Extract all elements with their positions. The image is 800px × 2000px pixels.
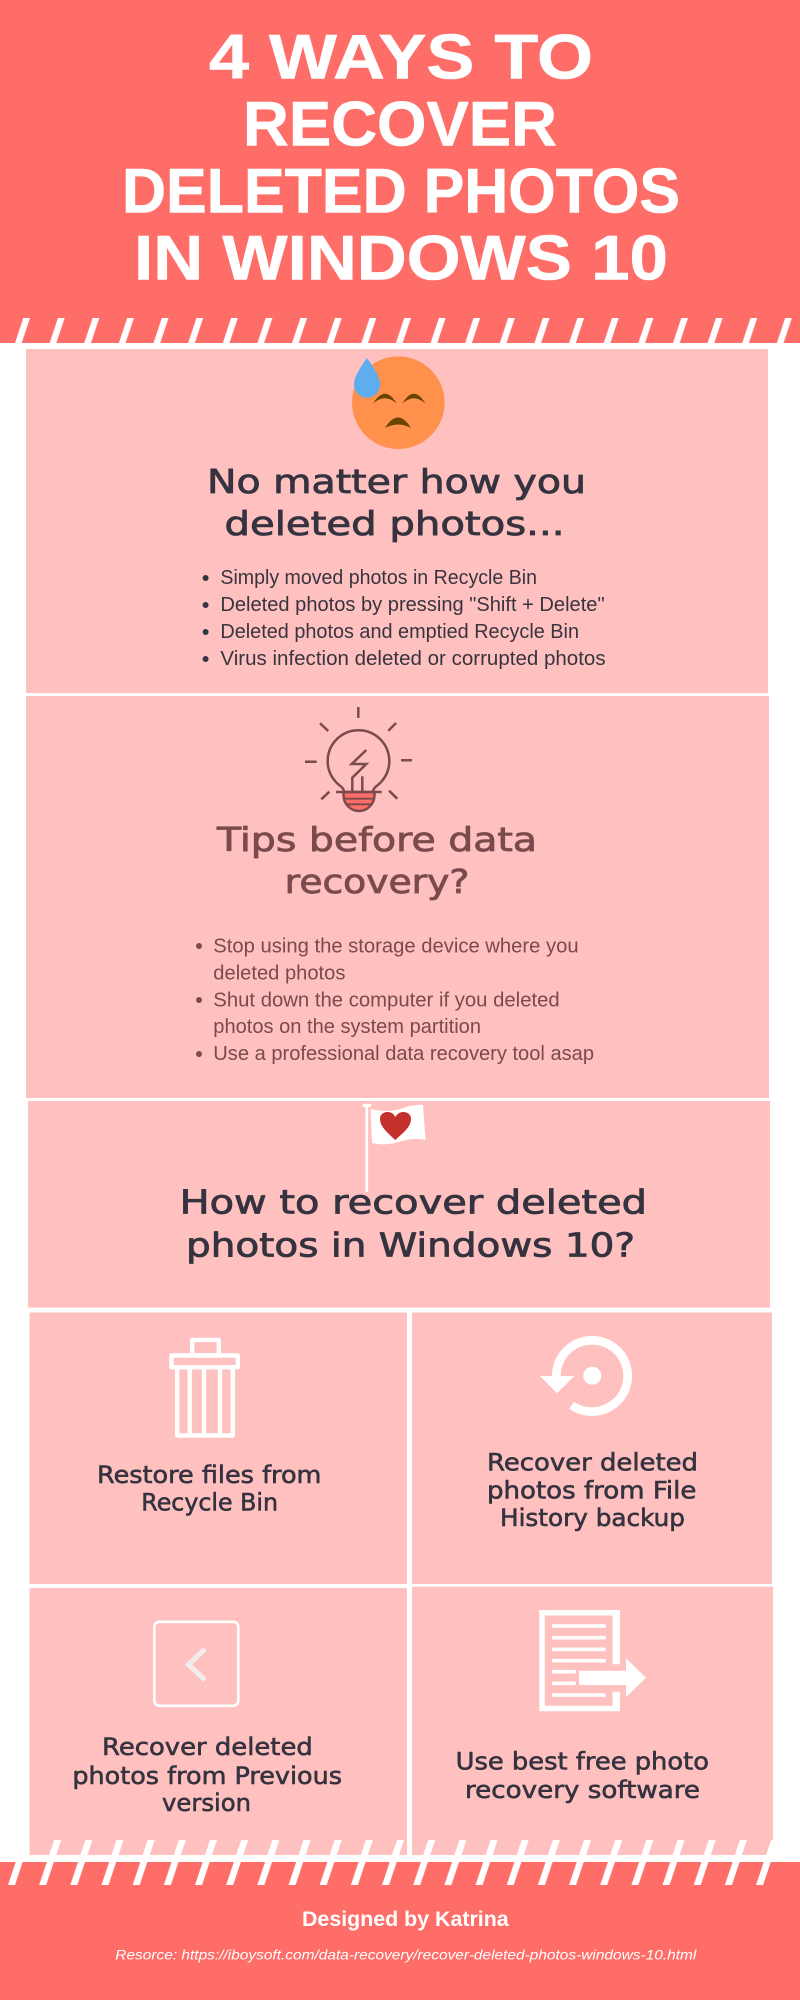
panel: no matter how you deleted photos xyxy=(26,349,768,693)
heading: tips before data recovery: Tips before data xyxy=(216,820,537,859)
heading: how to recover deleted photos xyxy=(180,1183,647,1264)
label: recovery software: recovery software xyxy=(465,1776,700,1804)
list: ways photos get deleted xyxy=(203,567,606,670)
icon: heart flag xyxy=(362,1104,426,1192)
list: tips: Use a professional data recovery tool asap xyxy=(213,1043,594,1065)
card: recycle bin xyxy=(30,1312,407,1584)
footer banner xyxy=(0,1862,800,2000)
source link text: Resorce: https://iboysoft.com/data-recovery/recover-deleted-photos-windows-10.html xyxy=(115,1946,697,1962)
title xyxy=(122,22,680,294)
label: recovery software: Use best free photo xyxy=(456,1748,709,1776)
list: tips: Shut down the computer if you deleted xyxy=(213,989,560,1011)
title: IN WINDOWS 10 xyxy=(134,224,668,294)
label: recovery software xyxy=(456,1748,709,1804)
list: ways photos get deleted: Deleted photos by pressing "Shift + Delete" xyxy=(220,594,605,616)
label: restore files: Restore files from xyxy=(97,1461,321,1489)
header banner xyxy=(0,0,800,343)
label: file history: photos from File xyxy=(487,1477,696,1505)
label: file history: History backup xyxy=(500,1504,685,1532)
label: restore files: Recycle Bin xyxy=(141,1489,278,1517)
list: tips xyxy=(196,935,594,1065)
card: previous version xyxy=(30,1588,407,1855)
icon: rewind circle xyxy=(540,1340,628,1412)
label: previous version: version xyxy=(162,1789,251,1817)
icon: back arrow box xyxy=(154,1622,238,1706)
label: file history xyxy=(487,1448,698,1532)
heading: tips before data recovery: recovery? xyxy=(285,862,469,901)
title: DELETED PHOTOS xyxy=(122,156,680,226)
panel: tips before data recovery xyxy=(26,696,769,1098)
heading: no matter how you deleted photos: No matter how you xyxy=(207,462,586,501)
title: 4 WAYS TO xyxy=(209,22,593,92)
heading: tips before data recovery xyxy=(216,820,537,901)
heading: no matter how you deleted photos: deleted photos... xyxy=(224,504,564,543)
panel: how to recover xyxy=(28,1101,770,1308)
label: file history: Recover deleted xyxy=(487,1448,698,1476)
list: ways photos get deleted: Simply moved photos in Recycle Bin xyxy=(220,567,537,589)
list: tips: deleted photos xyxy=(213,962,345,984)
list: ways photos get deleted: Deleted photos and emptied Recycle Bin xyxy=(220,621,579,643)
icon: sweating sad face xyxy=(352,356,445,449)
card: file history xyxy=(412,1312,772,1584)
footer credit: Designed by Katrina xyxy=(302,1908,509,1931)
heading: how to recover deleted photos: photos in Windows 10? xyxy=(186,1226,635,1264)
list: tips: Stop using the storage device where you xyxy=(213,935,579,957)
icon: document with arrow xyxy=(539,1610,646,1711)
title: RECOVER xyxy=(243,90,557,160)
icon: trash can xyxy=(172,1340,238,1436)
heading: how to recover deleted photos: How to recover deleted xyxy=(180,1183,647,1222)
label: previous version: photos from Previous xyxy=(72,1762,342,1790)
label: previous version xyxy=(72,1733,342,1817)
icon: light bulb xyxy=(305,707,412,811)
card: recovery software xyxy=(412,1587,773,1855)
label: restore files xyxy=(97,1461,321,1517)
label: previous version: Recover deleted xyxy=(102,1733,313,1761)
list: tips: photos on the system partition xyxy=(213,1016,481,1038)
list: ways photos get deleted: Virus infection deleted or corrupted photos xyxy=(220,648,606,670)
heading: no matter how you deleted photos xyxy=(207,462,586,543)
